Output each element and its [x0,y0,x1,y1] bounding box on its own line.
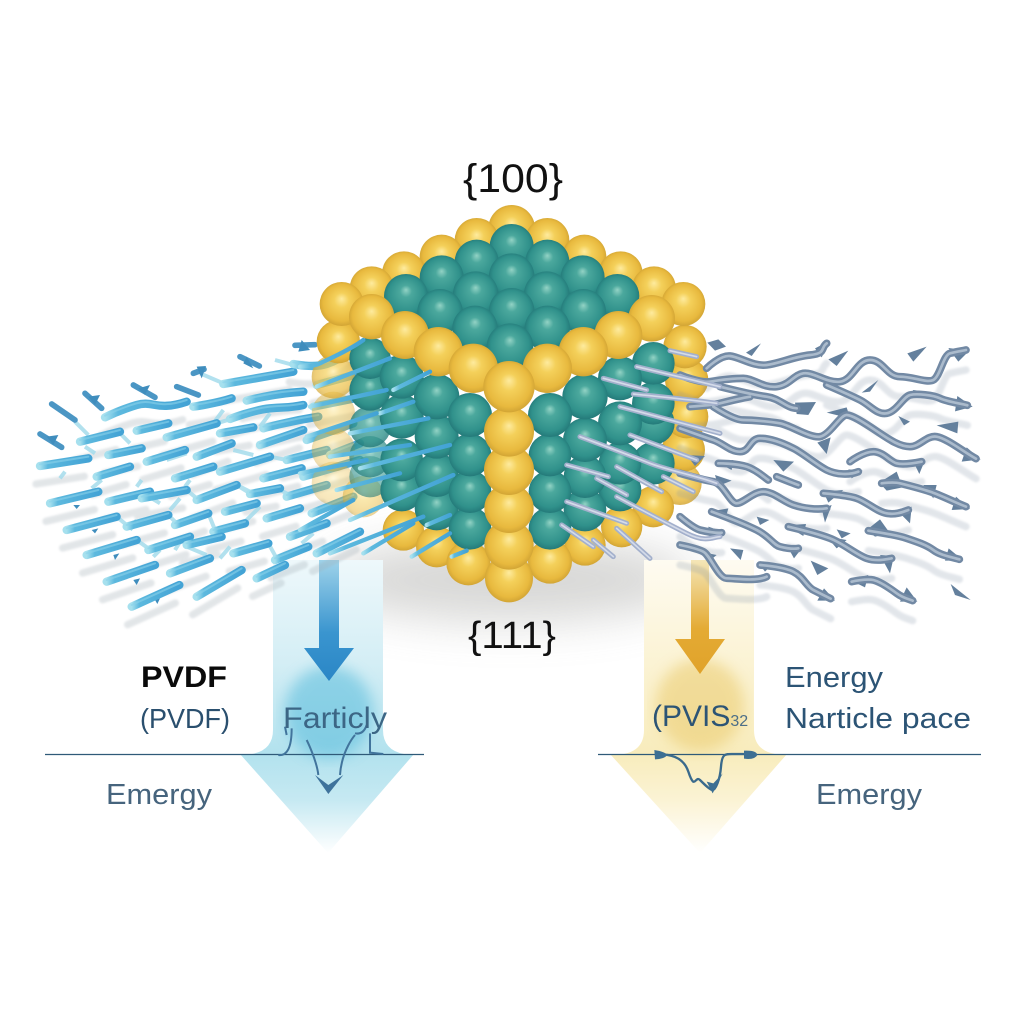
arrows: lavender flow over the cube [562,351,720,558]
panel: gold energy arrow [610,560,787,853]
label: left Emergy: Emergy [106,779,213,811]
atoms: top gold rim [320,205,705,326]
chart: left energy well curve [278,725,383,794]
arrows: lavender flow colour [562,351,720,558]
icon: gold down arrow [675,560,725,674]
arrow field: blue body colour [40,343,360,607]
arrow heads and fins: slate flow [687,339,981,602]
chart: right energy well curve [654,750,757,793]
icon: well arrow tip [315,775,343,794]
atoms: teal top face [384,224,639,370]
atoms: teal right face [528,342,675,550]
label: (PVDF): (PVDF) [140,703,230,734]
panel: blue energy arrow [240,560,414,853]
label: PVDF: PVDF [141,661,227,694]
heading: {100} facet label: {100} [463,157,563,201]
arrow field: slate flow shadows [680,363,976,621]
arrow field: slate body colour [680,343,976,601]
atoms: front gold top edges [349,294,675,393]
atoms: bottom gold edge [343,476,674,585]
arrow field: blue incoming flow [40,345,360,607]
baseline: right energy axis [598,754,981,756]
icon: blue down arrow [304,560,354,681]
atoms: back gold columns [312,320,708,505]
icon: well end dots and tip [654,750,757,793]
arrow field: blue flow shadows [36,363,356,625]
label: Energy: Energy [785,662,884,694]
label: Farticly: Farticly [283,702,387,735]
atoms: teal left face [349,338,492,550]
arrow field: slate outgoing flow [680,343,976,601]
label: right Emergy: Emergy [816,779,923,811]
label: Narticle pace: Narticle pace [785,703,971,735]
heading: {111} facet label: {111} [468,615,556,657]
atoms: front vertical gold edge [483,361,535,602]
icon: metal nanoparticle cube [312,205,708,602]
label: (PVIS32: (PVIS32 [652,700,748,733]
baseline: left energy axis [45,754,424,756]
arrows: blue flow over the cube [300,340,467,557]
cube ground shadow [325,538,695,622]
arrow field: blue threads and top fins [40,340,315,604]
